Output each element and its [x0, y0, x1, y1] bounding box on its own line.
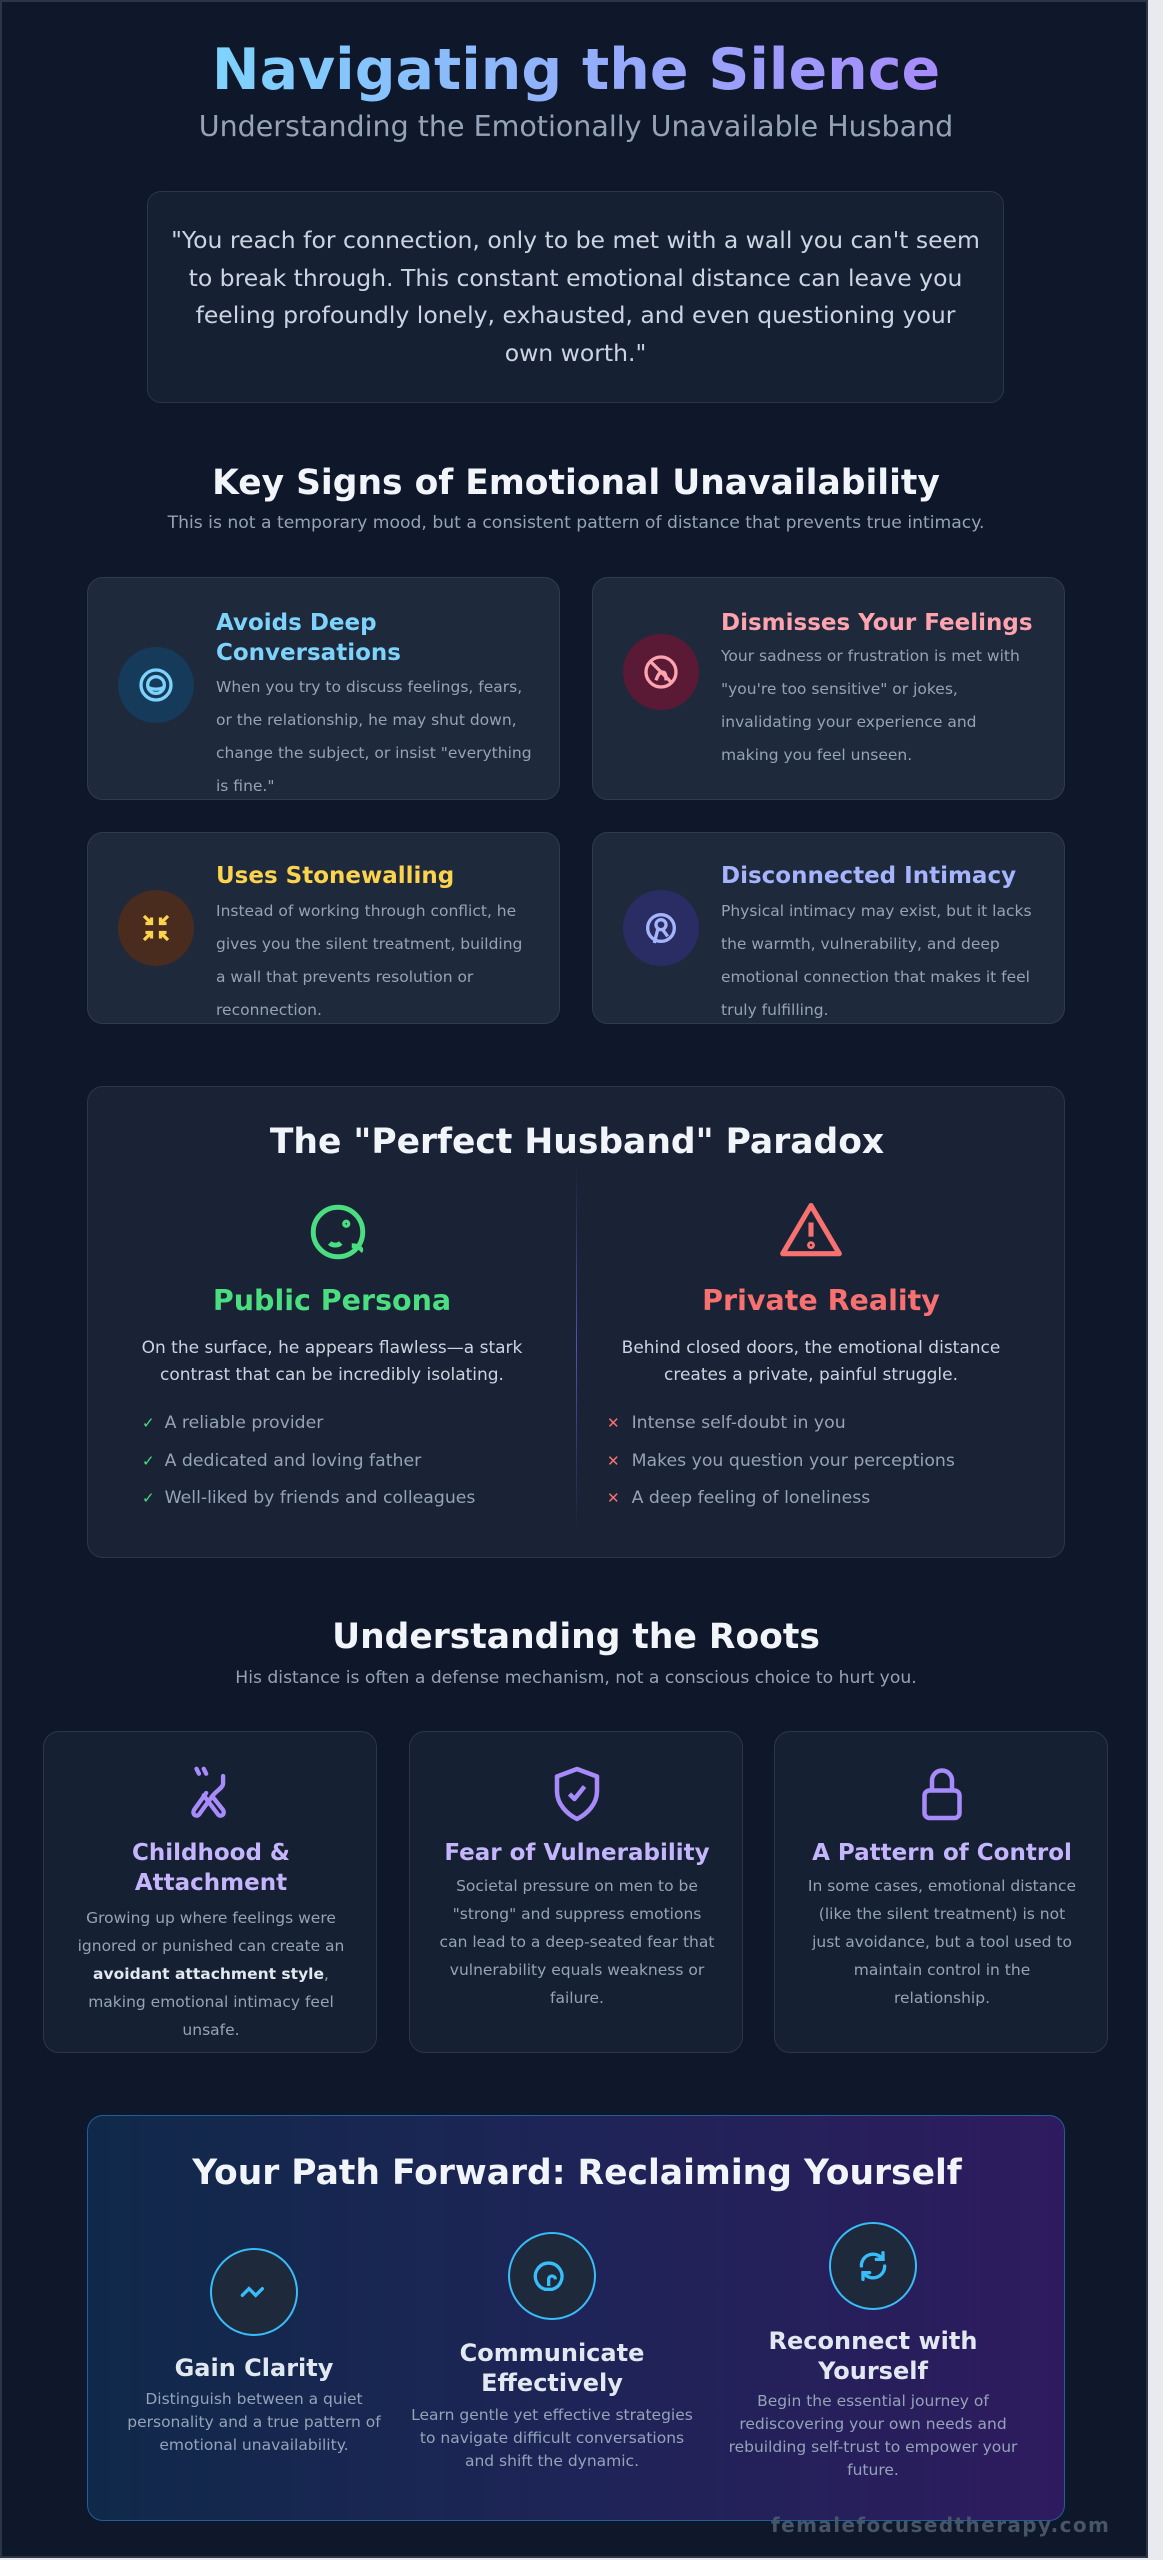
- panel: paradox: [87, 1086, 1065, 1558]
- divider: [576, 1162, 577, 1532]
- list: [142, 1413, 475, 1508]
- text: In some cases, emotional distance (like the silent treatment) is not just avoidance, but a tool used to maintain control in the relationship.: [808, 1877, 1076, 2007]
- icon: tools: [191, 1766, 226, 1818]
- icon: wave: [210, 2248, 298, 2336]
- text: On the surface, he appears flawless—a stark contrast that can be incredibly isolating.: [142, 1338, 522, 1385]
- list: ✓ Well-liked by friends and colleagues: [142, 1488, 475, 1508]
- list: ✕ Intense self-doubt in you: [607, 1413, 846, 1433]
- subheading: roots: His distance is often a defense mechanism, not a conscious choice to hurt you.: [235, 1668, 917, 1688]
- column: public persona: [142, 1204, 522, 1508]
- list: ✓ A dedicated and loving father: [142, 1450, 421, 1470]
- list: ✕ Makes you question your perceptions: [607, 1450, 955, 1470]
- title: Communicate: [460, 2339, 644, 2367]
- title: Uses Stonewalling: [216, 863, 454, 889]
- list: [607, 1413, 955, 1508]
- text: can lead to a deep-seated fear that vulnerability equals weakness or failure.: [440, 1933, 714, 2007]
- title: [132, 1840, 290, 1896]
- title: Avoids Deep: [216, 610, 377, 636]
- column: private reality: [607, 1203, 1000, 1508]
- title: Disconnected Intimacy: [721, 863, 1016, 889]
- subheading: key signs: This is not a temporary mood, but a consistent pattern of distance that prevents true intimacy.: [168, 513, 984, 533]
- heading: Private Reality: [702, 1284, 940, 1317]
- title: Gain Clarity: [175, 2354, 333, 2382]
- text: Societal pressure on men to be "strong" and suppress emotions: [453, 1877, 701, 1923]
- heading: roots: Understanding the Roots: [332, 1617, 820, 1657]
- heading: key signs: Key Signs of Emotional Unavailability: [212, 463, 940, 503]
- heading: The "Perfect Husband" Paradox: [270, 1122, 884, 1162]
- title: Conversations: [216, 640, 401, 666]
- icon: shield: [554, 1766, 600, 1822]
- text: Your sadness or frustration is met with "you're too sensitive" or jokes, invalidating your experience and making you feel unseen.: [721, 647, 1020, 764]
- icon: avoid: [118, 647, 194, 723]
- title: Yourself: [818, 2357, 928, 2385]
- card: childhood: [43, 1731, 377, 2053]
- text: Begin the essential journey of rediscovering your own needs and rebuilding self-trust to empower your future.: [729, 2392, 1017, 2479]
- icon: dismiss: [623, 634, 699, 710]
- title: Navigating the Silence: [212, 37, 940, 103]
- icon: lock: [922, 1768, 962, 1820]
- heading: Your Path Forward: Reclaiming Yourself: [192, 2153, 962, 2193]
- quote box: "You reach for connection, only to be met with a wall you can't seem to break through. This constant emotional distance can leave you feeling profoundly lonely, exhausted, and even questioning your own worth.": [171, 226, 980, 366]
- heading: Public Persona: [213, 1284, 451, 1317]
- card: disconnected intimacy: [592, 832, 1065, 1024]
- card: avoids deep conversations: [87, 577, 560, 800]
- title: Effectively: [481, 2369, 623, 2397]
- title: Dismisses Your Feelings: [721, 610, 1033, 636]
- icon: refresh: [829, 2222, 917, 2310]
- card: pattern of control: [774, 1731, 1108, 2053]
- list: ✕ A deep feeling of loneliness: [607, 1488, 870, 1508]
- card: fear of vulnerability: [409, 1731, 743, 2053]
- icon: chat: [508, 2232, 596, 2320]
- text: When you try to discuss feelings, fears, or the relationship, he may shut down, change the subject, or insist "everything is fine.": [216, 678, 532, 795]
- panel: path forward: [87, 2115, 1065, 2521]
- card: stonewalling: [87, 832, 560, 1024]
- title: Childhood &: [132, 1840, 290, 1866]
- title: Reconnect with: [769, 2327, 977, 2355]
- text: Learn gentle yet effective strategies to navigate difficult conversations and shift the dynamic.: [411, 2406, 693, 2470]
- text: Instead of working through conflict, he gives you the silent treatment, building a wall that prevents resolution or reconnection.: [216, 902, 522, 1019]
- title: Attachment: [135, 1870, 287, 1896]
- icon: smile: [310, 1204, 366, 1260]
- subtitle: Understanding the Emotionally Unavailable Husband: [199, 110, 953, 143]
- step: reconnect: [729, 2222, 1018, 2479]
- title: A Pattern of Control: [812, 1840, 1072, 1866]
- text: Physical intimacy may exist, but it lacks the warmth, vulnerability, and deep emotional connection that makes it feel truly fulfilling.: [721, 902, 1032, 1019]
- title: [769, 2327, 977, 2385]
- title: Fear of Vulnerability: [444, 1840, 710, 1866]
- card: dismisses feelings: [592, 577, 1065, 800]
- icon: stonewall: [118, 890, 194, 966]
- quote box: [147, 191, 1004, 403]
- text: Distinguish between a quiet personality and a true pattern of emotional unavailability.: [127, 2390, 381, 2454]
- text: [440, 1877, 714, 2007]
- title: [216, 610, 401, 666]
- icon: warning: [780, 1203, 842, 1256]
- text: Behind closed doors, the emotional distance creates a private, painful struggle.: [622, 1338, 1000, 1385]
- step: gain clarity: [127, 2248, 381, 2454]
- step: communicate: [411, 2232, 693, 2470]
- icon: intimacy: [623, 890, 699, 966]
- watermark: femalefocusedtherapy.com: [771, 2513, 1110, 2537]
- title: [460, 2339, 644, 2397]
- text: Growing up where feelings were ignored or punished can create an avoidant attachment style, making emotional intimacy feel unsafe.: [78, 1909, 344, 2039]
- list: ✓ A reliable provider: [142, 1413, 323, 1433]
